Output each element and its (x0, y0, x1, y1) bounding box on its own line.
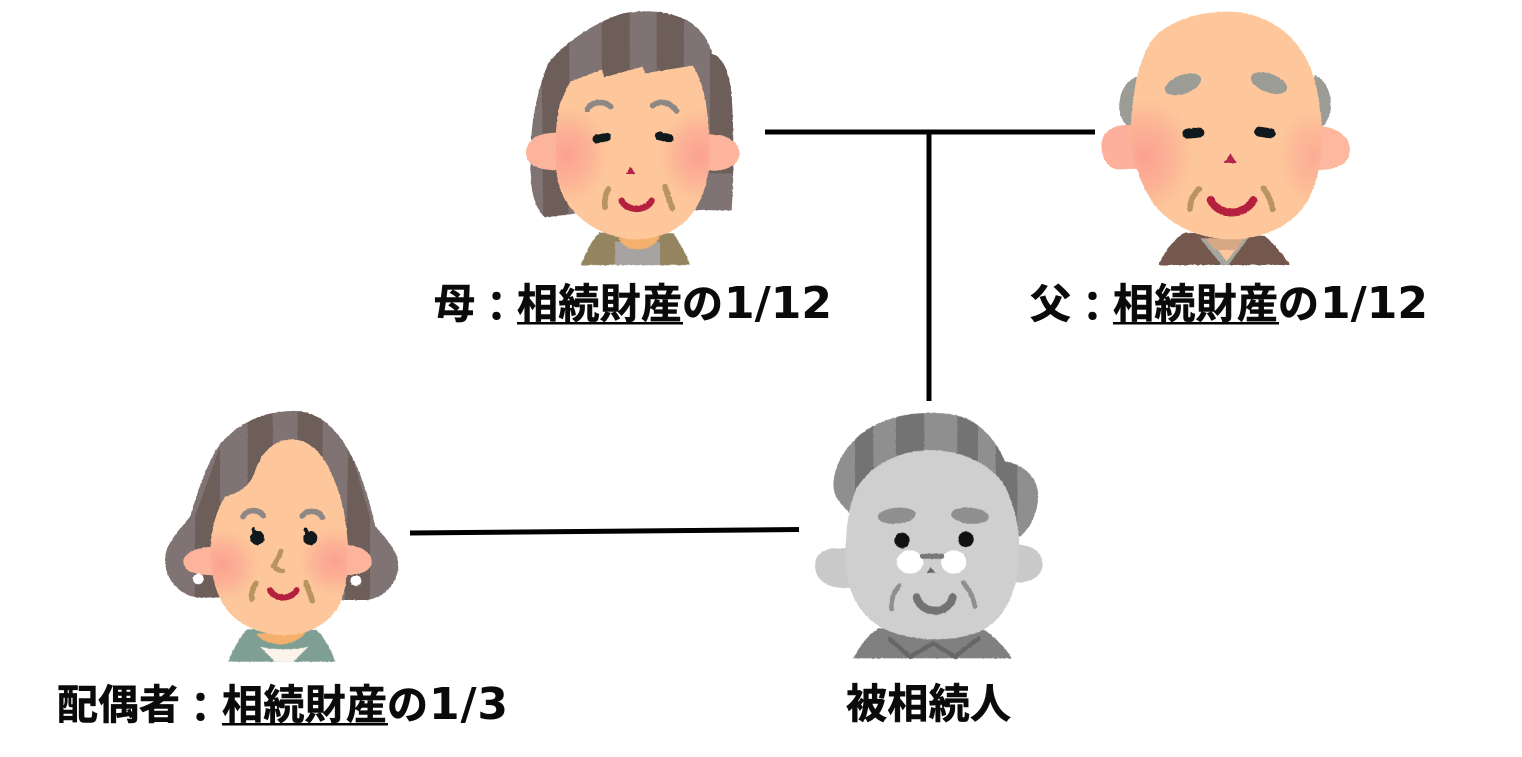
connector: parents to deceased vertical line (926, 132, 932, 401)
connector: parents horizontal line (765, 130, 1095, 134)
label: father share: 1/12 (1320, 278, 1428, 329)
label: spouse share (57, 679, 508, 731)
label: father share: ： (1072, 284, 1113, 330)
label: spouse share: 相続財産 (222, 682, 387, 728)
label: mother share: の (682, 281, 723, 327)
icon: father (1095, 12, 1350, 265)
label: mother share: 1/12 (724, 278, 832, 329)
label: spouse share: の (387, 682, 428, 728)
label: spouse share: 配偶者 (57, 682, 180, 728)
label: deceased: 被相続人 (846, 681, 1011, 727)
label: father share (1030, 278, 1428, 330)
label: mother share: ： (476, 284, 517, 330)
label: spouse share: 1/3 (429, 679, 508, 730)
label: mother share (434, 278, 832, 330)
connector: spouse to deceased line (410, 530, 799, 533)
label: father share: 父 (1030, 281, 1071, 327)
label: father share: の (1278, 281, 1319, 327)
icon: spouse (160, 407, 403, 662)
icon: deceased (grayscale) (815, 407, 1043, 658)
label: spouse share: ： (180, 685, 221, 731)
label: mother share: 母 (434, 281, 475, 327)
icon: mother (523, 0, 742, 265)
label: mother share: 相続財産 (517, 281, 682, 327)
label: father share: 相続財産 (1113, 281, 1278, 327)
